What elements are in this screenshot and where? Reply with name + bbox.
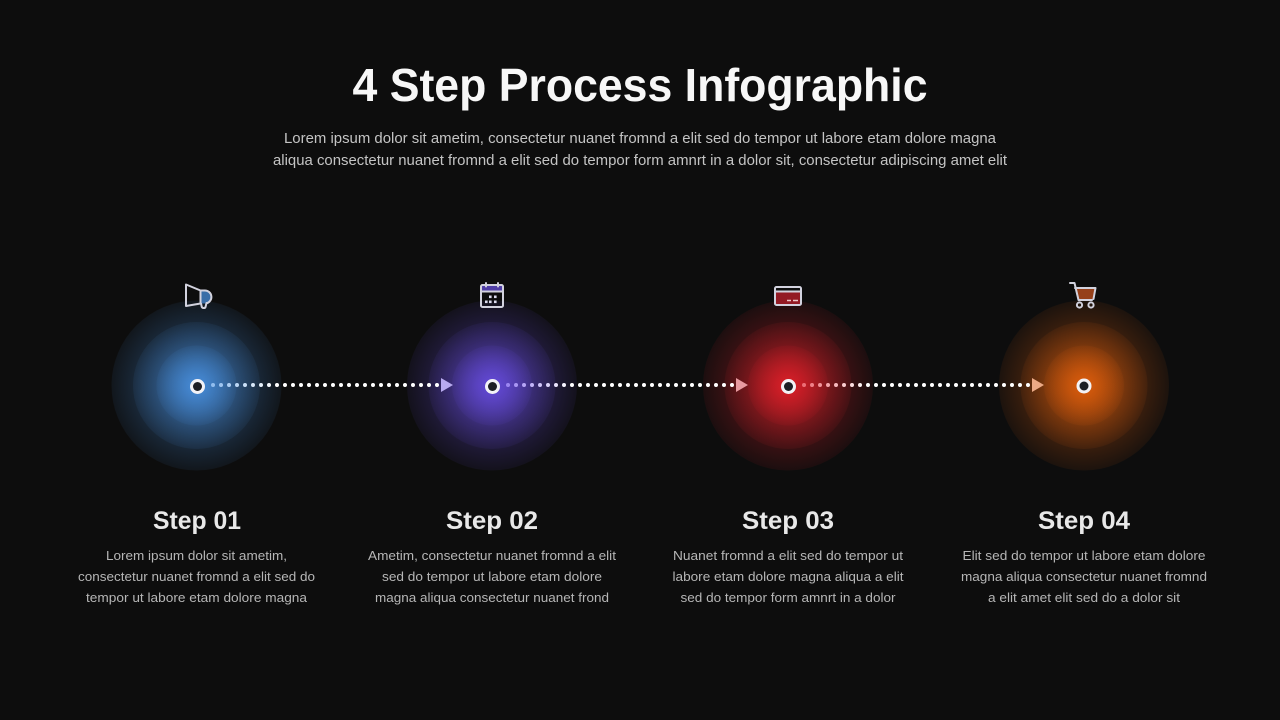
heading: step 04: Step 04	[1038, 507, 1130, 535]
icon: credit card	[775, 287, 801, 305]
description: step 01: tempor ut labore etam dolore magna	[86, 590, 308, 605]
icon: calendar	[481, 283, 503, 307]
description: step 03	[672, 548, 904, 605]
description: step 04: magna aliqua consectetur nuanet fromnd	[961, 569, 1207, 584]
panel: step 01 text	[78, 507, 315, 605]
panel: step 02 circles	[407, 300, 577, 470]
heading: step 01: Step 01	[153, 507, 241, 535]
heading: step 02: Step 02	[446, 507, 538, 535]
description: step 04: Elit sed do tempor ut labore etam dolore	[962, 548, 1206, 563]
description: step 04	[961, 548, 1207, 605]
description: step 01: consectetur nuanet fromnd a elit sed do	[78, 569, 315, 584]
subtitle text: aliqua consectetur nuanet fromnd a elit sed do tempor form amnrt in a dolor sit, consectetur adipiscing amet elit	[273, 152, 1008, 169]
heading: step 03: Step 03	[742, 507, 834, 535]
node: step 03	[781, 379, 796, 394]
description: step 02: magna aliqua consectetur nuanet frond	[375, 590, 609, 605]
node: step 04	[1076, 378, 1092, 394]
description: step 03: labore etam dolore magna aliqua a elit	[672, 569, 904, 584]
subtitle text: Lorem ipsum dolor sit ametim, consectetur nuanet fromnd a elit sed do tempor ut labore etam dolore magna	[284, 130, 997, 147]
description: step 04: a elit amet elit sed do a dolor sit	[988, 590, 1180, 605]
description: step 01: Lorem ipsum dolor sit ametim,	[106, 548, 287, 563]
arrow: step 02 to 03	[508, 378, 748, 392]
description: step 03: sed do tempor form amnrt in a dolor	[680, 590, 896, 605]
panel: step 01 circles	[112, 300, 282, 470]
description: step 02: Ametim, consectetur nuanet fromnd a elit	[368, 548, 616, 563]
panel: step 03 text	[672, 507, 904, 605]
description: step 02	[368, 548, 616, 605]
subtitle text	[273, 130, 1008, 169]
panel: step 02 text	[368, 507, 616, 605]
title: 4 Step Process Infographic	[352, 59, 928, 111]
description: step 02: sed do tempor ut labore etam dolore	[382, 569, 602, 584]
arrow: step 03 to 04	[804, 378, 1044, 392]
description: step 01	[78, 548, 315, 605]
node: step 01	[190, 379, 205, 394]
node: step 02	[485, 379, 500, 394]
icon: shopping cart	[1070, 283, 1096, 308]
panel: step 04 circles	[999, 300, 1169, 470]
panel: step 04 text	[961, 507, 1207, 605]
icon: megaphone	[186, 284, 211, 308]
panel: step 03 circles	[703, 300, 873, 470]
description: step 03: Nuanet fromnd a elit sed do tempor ut	[673, 548, 903, 563]
arrow: step 01 to 02	[213, 378, 453, 392]
